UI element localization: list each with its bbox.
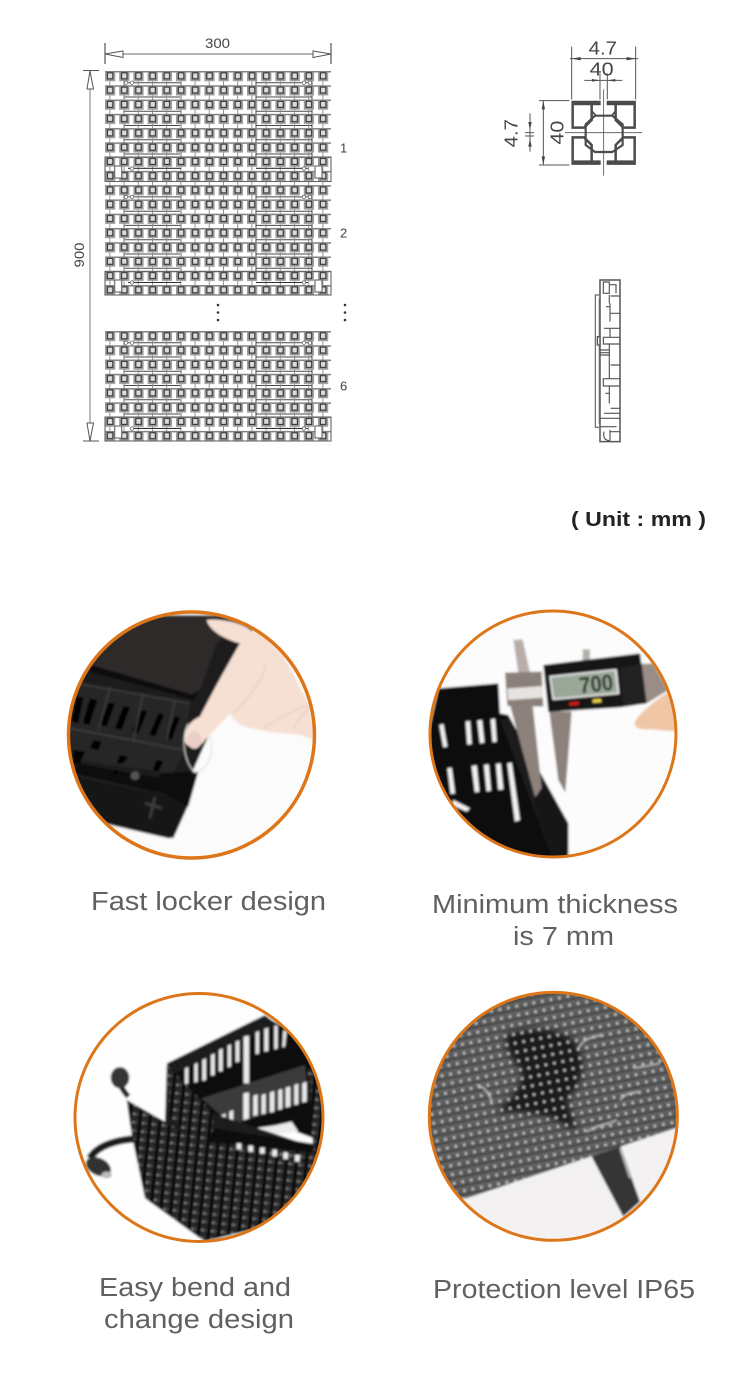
- photo circle: bent panels: [74, 992, 324, 1243]
- caption: Easy bend and: [99, 1274, 291, 1302]
- caption: is 7 mm: [513, 923, 614, 951]
- caption: Protection level IP65: [433, 1276, 695, 1304]
- section dimensions: 4.7: [589, 37, 617, 58]
- feature: protection level: [420, 985, 695, 1304]
- cross-section drawing: [501, 37, 642, 176]
- height dimension 900: 900: [72, 242, 87, 268]
- width dimension 300: 300: [205, 36, 230, 51]
- feature: fast locker design: [60, 600, 330, 916]
- front view technical drawing: [72, 36, 347, 441]
- module numbers: 1: [340, 140, 347, 156]
- caption: [432, 891, 678, 951]
- side profile drawing: [595, 280, 620, 442]
- caption: change design: [104, 1306, 294, 1334]
- lower module rows: [105, 331, 331, 441]
- photo circle: caliper: 700: [578, 669, 614, 698]
- width dimension 300: [105, 36, 331, 64]
- module numbers: 2: [340, 226, 347, 240]
- caption: [99, 1274, 294, 1334]
- feature: minimum thickness: [428, 610, 678, 946]
- section dimensions: 40: [590, 58, 614, 79]
- height dimension 900: [72, 70, 99, 441]
- upper module rows: [105, 71, 331, 295]
- caption: Minimum thickness: [432, 891, 678, 919]
- photo circle: caliper: [428, 610, 678, 858]
- module numbers: [340, 140, 347, 394]
- aluminium profile: [573, 102, 635, 164]
- feature: easy bend: [65, 985, 335, 1334]
- caption: Fast locker design: [91, 888, 326, 916]
- infographic: [66, 38, 705, 1334]
- section dimensions: 4.7: [501, 119, 522, 147]
- module numbers: 6: [340, 378, 347, 394]
- unit note: ( Unit : mm ): [571, 509, 706, 531]
- section dimensions: [501, 37, 642, 176]
- section dimensions: 40: [547, 121, 568, 145]
- continuation dots: [217, 304, 346, 321]
- photo circle: wet LED panel: [428, 990, 679, 1242]
- photo circle: hand on locker: [66, 610, 316, 860]
